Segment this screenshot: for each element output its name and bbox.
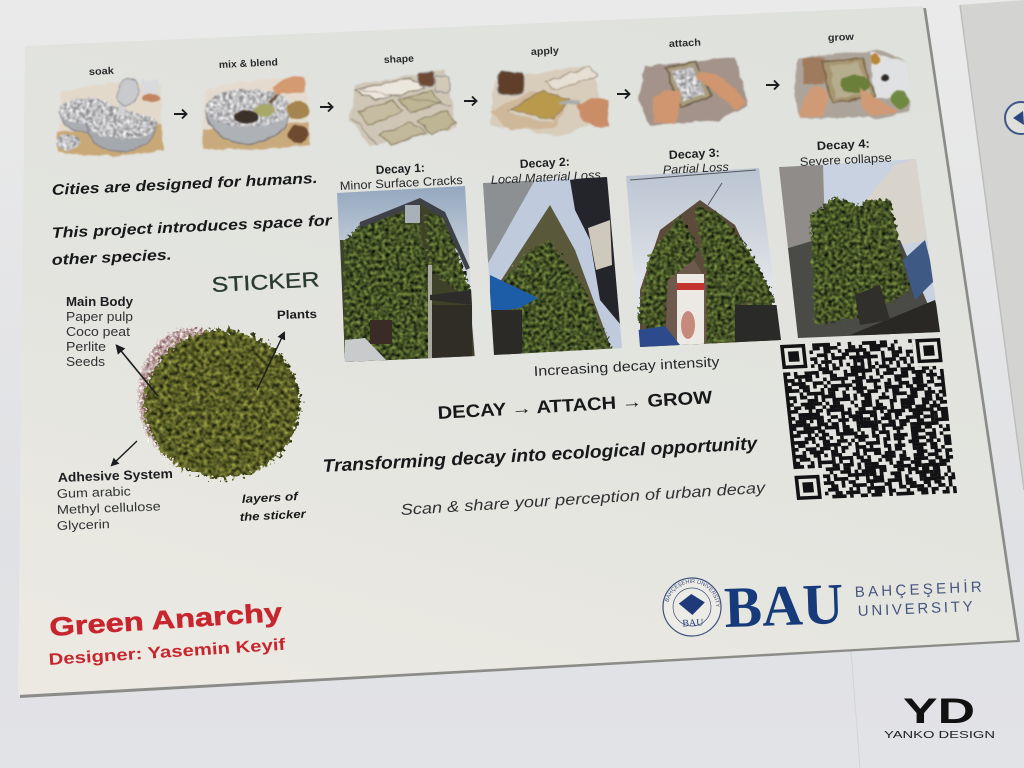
label: adhesive system: Glycerin — [57, 517, 110, 533]
process step: apply: apply — [531, 46, 560, 58]
university name: UNIVERSITY — [857, 598, 973, 620]
decay 4 caption: Decay 4: — [816, 136, 870, 153]
watermark: Yanko Design: YANKO DESIGN — [884, 729, 995, 741]
arrow: main body — [117, 346, 158, 396]
process step: grow — [793, 32, 910, 118]
intro statement — [51, 170, 333, 269]
arrow — [320, 102, 332, 112]
arrow — [617, 90, 630, 98]
process step: apply — [490, 46, 608, 136]
decay 1 caption: Minor Surface Cracks — [339, 173, 463, 193]
process step: mix & blend — [202, 57, 310, 149]
slogan: decay attach grow: DECAY → ATTACH → GROW — [437, 387, 713, 423]
label: main body: Coco peat — [66, 325, 131, 339]
label: adhesive system: Gum arabic — [57, 484, 131, 501]
decay 4 caption — [799, 136, 892, 169]
university name — [854, 578, 982, 620]
university seal: BAU — [682, 617, 704, 630]
label: adhesive system: Methyl cellulose — [57, 499, 161, 517]
decay 1 photo — [337, 186, 475, 362]
tagline: Transforming decay into ecological opportunity — [322, 433, 759, 476]
sticker image — [138, 328, 300, 478]
decay 3 caption: Partial Loss — [662, 160, 729, 177]
QR code — [780, 338, 957, 500]
intro statement: other species. — [51, 247, 172, 269]
label: adhesive system: Adhesive System — [58, 466, 173, 485]
wall panel seam — [851, 650, 860, 768]
label: plants: Plants — [277, 307, 317, 322]
decay 1 caption: Decay 1: — [375, 161, 425, 177]
BAU wordmark: BAU — [723, 571, 844, 640]
process step: attach — [638, 38, 748, 125]
arrow — [766, 80, 778, 90]
decay 3 photo — [626, 168, 781, 347]
decay 2 caption: Decay 2: — [519, 155, 570, 171]
decay 2 caption — [490, 155, 601, 187]
watermark: Yanko Design — [884, 692, 995, 741]
process step: shape: shape — [384, 54, 415, 66]
arrow: adhesive system — [112, 441, 137, 465]
university name: BAHÇEŞEHİR — [854, 578, 982, 601]
decay 4 caption: Severe collapse — [799, 151, 892, 169]
call to action: Scan & share your perception of urban decay — [400, 480, 767, 519]
decay 4 photo — [775, 155, 945, 340]
label: adhesive system — [57, 466, 173, 533]
university seal: BAHÇEŞEHİR UNIVERSITY — [664, 578, 720, 607]
label: main body — [66, 295, 133, 369]
process step: mix & blend: mix & blend — [219, 57, 278, 71]
sticker heading: STICKER — [211, 268, 320, 297]
neighbouring poster — [960, 0, 1024, 490]
watermark: Yanko Design: YD — [903, 692, 975, 731]
intro statement: This project introduces space for — [51, 212, 333, 242]
label: main body: Perlite — [66, 340, 106, 354]
label: main body: Seeds — [66, 355, 105, 369]
label: main body: Paper pulp — [66, 310, 133, 324]
process step: soak: soak — [89, 66, 115, 78]
process step: grow: grow — [828, 32, 854, 44]
intro statement: Cities are designed for humans. — [51, 170, 318, 199]
process step: shape — [350, 54, 457, 146]
decay 3 caption — [662, 146, 729, 177]
arrow — [174, 110, 186, 118]
caption: increasing decay intensity: Increasing decay intensity — [533, 353, 720, 379]
caption: layers of the sticker — [240, 491, 307, 524]
caption: layers of the sticker: layers of — [242, 491, 299, 506]
caption: layers of the sticker: the sticker — [240, 509, 307, 524]
decay 2 caption: Local Material Loss — [490, 168, 601, 187]
designer credit: Designer: Yasemin Keyif — [48, 636, 286, 669]
university seal — [662, 577, 722, 637]
process step: attach: attach — [669, 38, 701, 50]
arrow: plants — [257, 333, 284, 390]
project title: Green Anarchy — [48, 597, 284, 642]
decay 1 caption — [339, 161, 463, 193]
decay 2 photo — [483, 177, 622, 355]
arrow — [464, 96, 476, 106]
decay 3 caption: Decay 3: — [668, 146, 720, 162]
label: main body: Main Body — [66, 295, 133, 309]
process step: soak — [56, 66, 163, 156]
